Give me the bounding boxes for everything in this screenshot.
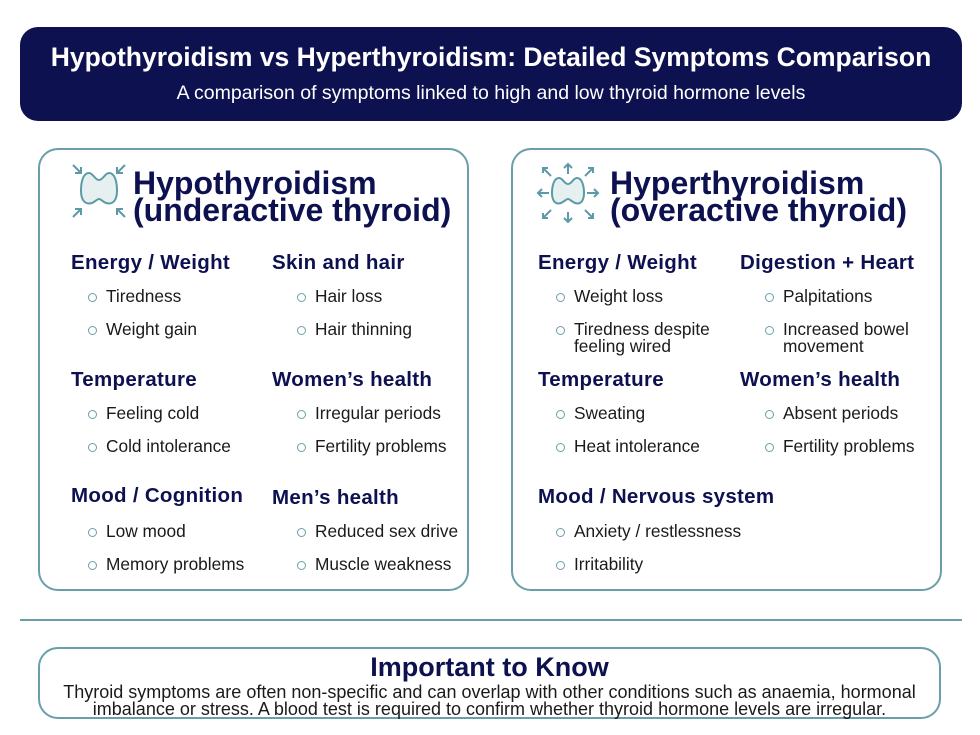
panel: hypothyroidism: Fertility problems: [315, 436, 447, 456]
section: skin and hair: Skin and hair: [272, 251, 405, 274]
panel: hypothyroidism: Feeling cold: [106, 403, 199, 423]
panel: hypothyroidism: [38, 148, 469, 591]
panel: hyperthyroidism: Irritability: [574, 554, 643, 574]
section: digestion + heart: Digestion + Heart: [740, 251, 914, 274]
section: women's health: Women’s health: [272, 368, 432, 391]
panel: hyperthyroidism: Anxiety / restlessness: [574, 521, 741, 541]
panel: hypothyroidism: Low mood: [106, 521, 186, 541]
panel: hypothyroidism: Hair loss: [315, 286, 382, 306]
panel: hyperthyroidism: movement: [783, 336, 864, 356]
panel: hypothyroidism: Irregular periods: [315, 403, 441, 423]
panel: hypothyroidism: Cold intolerance: [106, 436, 231, 456]
panel: hyperthyroidism: feeling wired: [574, 336, 671, 356]
panel title: (overactive thyroid): [610, 192, 907, 228]
panel: important to know: [38, 647, 941, 719]
body text: [63, 682, 916, 719]
panel: hypothyroidism: Weight gain: [106, 319, 197, 339]
section: men's health: Men’s health: [272, 486, 399, 509]
panel title: Hypothyroidism: [133, 165, 377, 201]
panel title: [133, 165, 451, 228]
panel title: (underactive thyroid): [133, 192, 451, 228]
panel: hypothyroidism: Hair thinning: [315, 319, 412, 339]
section: women's health: Women’s health: [740, 368, 900, 391]
panel: hyperthyroidism: Increased bowel: [783, 319, 909, 339]
panel: hyperthyroidism: Weight loss: [574, 286, 663, 306]
panel: hypothyroidism: Muscle weakness: [315, 554, 451, 574]
panel: hypothyroidism: Tiredness: [106, 286, 181, 306]
body text: Thyroid symptoms are often non-specific and can overlap with other conditions such as anaemia, hormonal: [63, 682, 916, 702]
section: energy/weight: Energy / Weight: [71, 251, 230, 274]
panel title: Hyperthyroidism: [610, 165, 864, 201]
heading: Important to Know: [370, 652, 609, 682]
panel: hypothyroidism: Reduced sex drive: [315, 521, 458, 541]
icon: thyroid with outward arrows: [536, 162, 600, 224]
panel: hypothyroidism: Memory problems: [106, 554, 244, 574]
section: energy/weight: Energy / Weight: [538, 251, 697, 274]
panel: hyperthyroidism: Palpitations: [783, 286, 872, 306]
panel: hyperthyroidism: Tiredness despite: [574, 319, 710, 339]
header banner: [20, 27, 962, 121]
body text: imbalance or stress. A blood test is required to confirm whether thyroid hormone levels are irregular.: [93, 699, 886, 719]
icon: thyroid with inward arrows: [72, 164, 126, 218]
section: mood / nervous system: Mood / Nervous system: [538, 485, 774, 508]
panel: hyperthyroidism: [511, 148, 942, 591]
section: temperature: Temperature: [538, 368, 664, 391]
subtitle: A comparison of symptoms linked to high and low thyroid hormone levels: [177, 82, 805, 104]
panel: hyperthyroidism: Heat intolerance: [574, 436, 700, 456]
panel title: [610, 165, 907, 228]
panel: hyperthyroidism: Sweating: [574, 403, 645, 423]
title: Hypothyroidism vs Hyperthyroidism: Detailed Symptoms Comparison: [51, 42, 931, 72]
section: mood: Mood / Cognition: [71, 484, 243, 507]
panel: hyperthyroidism: Fertility problems: [783, 436, 915, 456]
panel: hyperthyroidism: Absent periods: [783, 403, 898, 423]
section: temperature: Temperature: [71, 368, 197, 391]
